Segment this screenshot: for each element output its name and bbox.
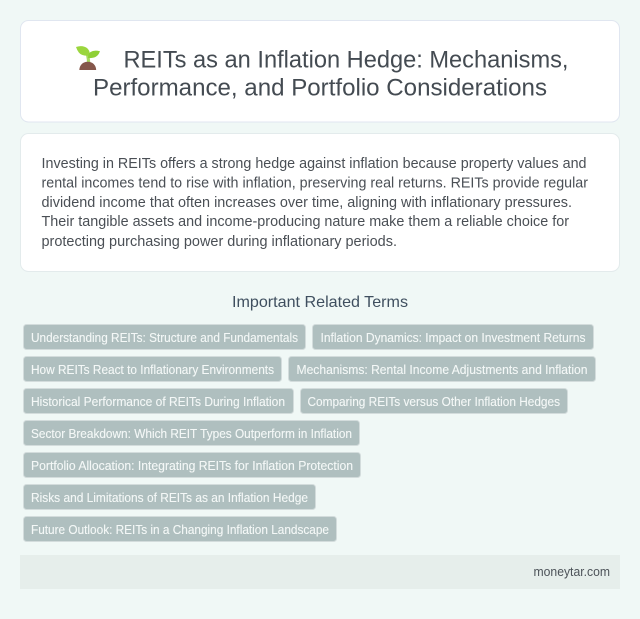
text block: introduction: Investing in REITs offers a strong hedge against inflation because property values and xyxy=(42,156,586,172)
tag: Risks and Limitations of REITs as an Inflation Hedge xyxy=(31,491,308,505)
title xyxy=(93,46,568,102)
text block: introduction: dividend income that often increases over time, aligning with inflationary pressures. xyxy=(42,195,572,211)
text block: introduction: Their tangible assets and income-producing nature make them a reliable choice for xyxy=(42,214,569,230)
icon: seedling xyxy=(76,46,100,70)
tag xyxy=(24,324,306,350)
tag xyxy=(24,452,360,478)
tag: Sector Breakdown: Which REIT Types Outperform in Inflation xyxy=(31,427,352,441)
title: Performance, and Portfolio Considerations xyxy=(93,74,547,102)
tag list: related terms xyxy=(24,324,596,542)
tag: Mechanisms: Rental Income Adjustments and Inflation xyxy=(296,363,588,377)
footer xyxy=(20,555,620,589)
tag xyxy=(312,324,594,350)
text block: introduction xyxy=(42,156,588,250)
tag xyxy=(24,484,316,510)
heading: related terms: Important Related Terms xyxy=(232,294,408,311)
tag xyxy=(24,356,282,382)
tag: Understanding REITs: Structure and Fundamentals xyxy=(31,331,298,345)
text block: introduction: rental incomes tend to rise with inflation, preserving real returns. REITs provide regular xyxy=(42,176,588,192)
tag: How REITs React to Inflationary Environments xyxy=(31,363,274,377)
tag xyxy=(24,388,294,414)
tag xyxy=(24,420,360,446)
text block: introduction: protecting purchasing power during inflationary periods. xyxy=(42,234,397,250)
tag xyxy=(300,388,568,414)
tag: Historical Performance of REITs During Inflation xyxy=(31,395,285,409)
panel: introduction card xyxy=(20,134,620,272)
tag: Future Outlook: REITs in a Changing Inflation Landscape xyxy=(31,523,329,537)
tag xyxy=(288,356,596,382)
panel: title card xyxy=(20,20,620,122)
tag: Inflation Dynamics: Impact on Investment Returns xyxy=(320,331,586,345)
tag: Portfolio Allocation: Integrating REITs for Inflation Protection xyxy=(31,459,353,473)
title: REITs as an Inflation Hedge: Mechanisms, xyxy=(124,46,568,74)
tag: Comparing REITs versus Other Inflation Hedges xyxy=(308,395,560,409)
footer: moneytar.com xyxy=(534,565,610,579)
tag xyxy=(24,516,336,542)
